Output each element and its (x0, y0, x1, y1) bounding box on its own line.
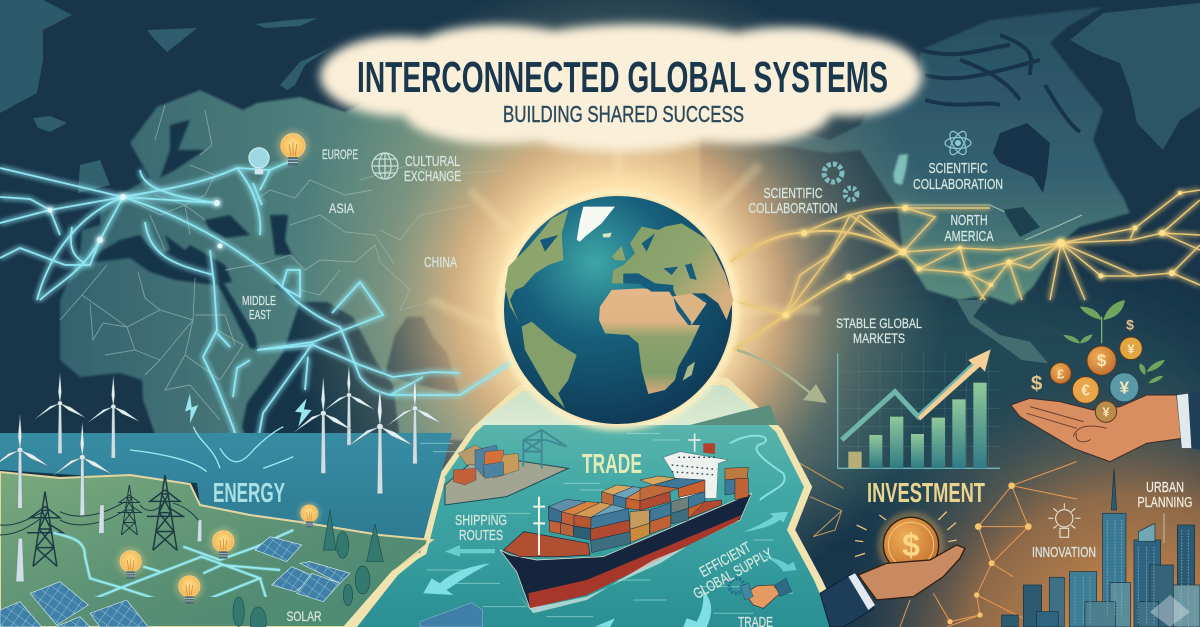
label: Solar Farms: SOLAR (286, 608, 322, 624)
label: Middle East: MIDDLE (242, 293, 276, 308)
lower hand with coin (820, 512, 965, 627)
lightbulbs on grid (117, 502, 321, 604)
bow mast (533, 497, 545, 555)
label: Scientific Collaboration right: SCIENTIFIC (928, 160, 988, 177)
icon: globe grid (372, 153, 398, 179)
icon: glowing bulb (277, 130, 309, 165)
port crane (523, 430, 567, 468)
growth arrow (842, 365, 973, 440)
coin symbols: ¥ (1119, 377, 1129, 397)
wave highlights (420, 433, 793, 617)
energy network: glowing cyan lines (0, 160, 512, 440)
right region labels (748, 129, 1003, 245)
constellation network (900, 462, 1077, 627)
label: Efficient Global Supply: GLOBAL SUPPLY (691, 545, 776, 603)
label: Efficient Global Supply: EFFICIENT (697, 539, 754, 581)
label: Innovation: INNOVATION (1032, 544, 1096, 561)
title: INTERCONNECTED GLOBAL SYSTEMS (357, 53, 888, 102)
label: Asia: ASIA (329, 200, 355, 216)
label: Cultural Exchange: CULTURAL (405, 153, 460, 170)
coin: dollar (1087, 346, 1116, 375)
ship mast and funnel (688, 433, 701, 452)
poles (16, 505, 202, 582)
water (0, 433, 452, 553)
panel: energy land and water (0, 433, 452, 627)
continent: Africa (599, 288, 700, 394)
label: North America: NORTH (950, 212, 988, 229)
hand (1011, 395, 1182, 462)
coin symbols (1031, 316, 1135, 419)
glow: halo around globe (288, 0, 948, 627)
bow deck (503, 532, 590, 557)
energy trade edge (345, 478, 444, 627)
coin symbols: $ (1126, 316, 1134, 332)
map: Greenland west (0, 0, 72, 113)
map: Greenland east (1070, 3, 1200, 150)
illustration: port and container ship (420, 430, 797, 627)
icon: pale bulb (249, 148, 269, 174)
map: USA border lines (905, 205, 1082, 240)
bow wake (517, 547, 687, 613)
map: Iceland and Svalbard (33, 18, 330, 132)
power cables (0, 502, 200, 535)
port quay (445, 455, 568, 505)
Bay of Bengal (385, 317, 460, 395)
label: Shipping Routes: SHIPPING (455, 512, 507, 529)
cuff (848, 573, 875, 610)
hand (858, 545, 965, 600)
icon: atom (945, 129, 971, 157)
label: Urban Planning: URBAN (1146, 479, 1184, 496)
map: Eurasia and Africa land (60, 90, 700, 440)
flow arrows (423, 512, 797, 627)
lightbulbs top left (249, 130, 309, 174)
wind turbines and energy infrastructure (0, 365, 443, 627)
port containers (453, 445, 519, 485)
map: dark seas (65, 120, 460, 440)
label: Cultural Exchange: EXCHANGE (404, 168, 461, 185)
icon: gears (824, 164, 857, 200)
label: North America: AMERICA (944, 228, 994, 245)
coin symbol: $ (902, 527, 920, 563)
title cloud (320, 24, 922, 152)
coin symbols: ¥ (1102, 405, 1109, 419)
Arabian sea (242, 302, 400, 440)
spire (1111, 468, 1117, 510)
label: Scientific Collaboration left: SCIENTIFIC (764, 185, 823, 202)
label: Trade: TRADE (582, 448, 642, 479)
pylons (27, 475, 183, 566)
map: North America land (765, 7, 1130, 305)
coin symbols: £ (1057, 366, 1065, 381)
urban planning leader line (1163, 513, 1165, 543)
continent: Greenland (577, 207, 615, 242)
subtitle: BUILDING SHARED SUCCESS (503, 101, 744, 127)
coin symbols: $ (1031, 372, 1043, 395)
label: Scientific Collaboration right: COLLABORATION (913, 176, 1003, 193)
grid lines (53, 530, 293, 627)
arrow: globe to markets (737, 350, 827, 403)
label: Scientific Collaboration left: COLLABORATION (748, 200, 838, 217)
continent: Eurasia (612, 223, 733, 320)
panel: trade (345, 375, 842, 627)
coin symbols: € (1081, 382, 1090, 399)
lightning bolts (185, 393, 312, 427)
city skyline (1002, 468, 1200, 627)
icon: handshake and gear (729, 578, 792, 608)
glow: orange bottom right (800, 340, 1200, 627)
ship hull (500, 493, 752, 608)
continent: Madagascar (683, 362, 695, 381)
windows (1075, 520, 1195, 627)
map: Britain (78, 160, 110, 193)
glow rays from globe (430, 135, 820, 330)
sleeve (1188, 390, 1200, 450)
coin symbols: ¥ (1127, 341, 1135, 356)
map: Africa and Asia borders (60, 105, 550, 420)
trade route hub nodes (783, 191, 1182, 318)
hill (690, 405, 778, 425)
globe (497, 189, 739, 431)
bars (848, 383, 987, 468)
plant sprouts (1063, 300, 1165, 383)
coin: pound (1050, 363, 1071, 384)
icon: innovation bulb (1048, 503, 1081, 537)
continent: South America (522, 322, 577, 408)
label: Energy: ENERGY (213, 477, 285, 508)
globe continents (505, 207, 733, 408)
coin (883, 517, 939, 573)
river swirl (730, 436, 785, 500)
label: Middle East: EAST (249, 307, 271, 322)
energy lines in water (130, 427, 293, 472)
coin: yen teal (1110, 373, 1139, 402)
sleeve (820, 575, 874, 627)
continent: Arabia (672, 293, 707, 325)
continent: North America (505, 210, 568, 323)
continent: Britain (612, 246, 626, 261)
energy network hub nodes (48, 194, 222, 248)
network nodes (947, 482, 1032, 624)
green land (0, 472, 432, 627)
label: Stable Global Markets: STABLE GLOBAL (836, 315, 922, 331)
central america land (957, 300, 1048, 363)
coin: euro (1072, 377, 1099, 403)
bar chart (838, 349, 1000, 468)
icon: island cluster (893, 154, 908, 185)
left region labels (242, 146, 461, 322)
watermark diamond (1150, 595, 1190, 627)
solar panels (0, 537, 350, 627)
label: China: CHINA (424, 254, 457, 271)
label: Investment: INVESTMENT (867, 477, 985, 508)
bottom container (420, 603, 483, 627)
cuff (1177, 393, 1192, 448)
top hand with coins (1011, 300, 1200, 462)
coin glow (878, 512, 944, 578)
trees (233, 510, 383, 627)
continent: Iceland (602, 233, 612, 237)
ship bridge (663, 452, 728, 498)
bridge window bands (672, 457, 717, 475)
trade routes: golden lines (730, 190, 1200, 350)
coin: low (1095, 401, 1117, 422)
map: Canadian channels and lakes (920, 35, 1080, 237)
sparkles (855, 512, 957, 557)
fingers and thumb (1027, 407, 1107, 442)
hull red stripe (528, 515, 742, 608)
growth arrow head (918, 349, 991, 421)
coin inner ring (888, 522, 934, 568)
label: Stable Global Markets: MARKETS (853, 330, 905, 346)
label: Shipping Routes: ROUTES (459, 527, 503, 544)
seas on globe (623, 233, 708, 325)
left triangle lines (800, 463, 843, 537)
coin symbols: $ (1097, 351, 1107, 370)
skyscrapers (1002, 513, 1200, 627)
funnel (703, 443, 715, 454)
investment illustrations (800, 300, 1200, 627)
coin: yen gold (1120, 337, 1142, 360)
label: Europe: EUROPE (322, 146, 358, 162)
Hudson bay (540, 235, 558, 252)
trade sky and hills (476, 380, 770, 425)
turbine group (0, 365, 443, 516)
containers (548, 467, 748, 553)
